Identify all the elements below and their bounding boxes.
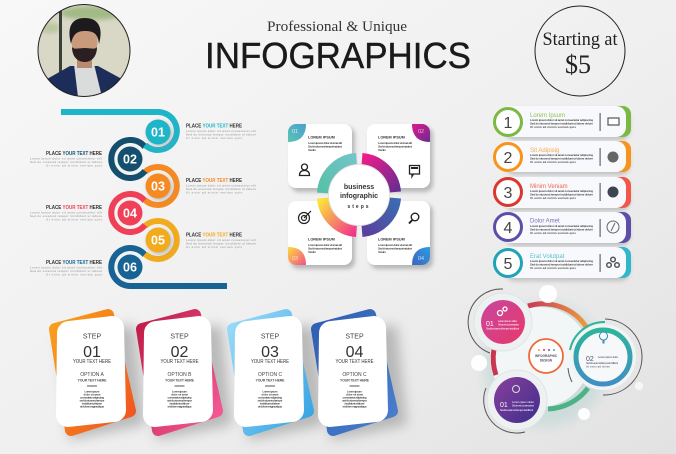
- step card 02: Lorem ipsum: [172, 390, 187, 394]
- row 5: Lorem ipsum dolor sit amet consectetur adipiscing: [530, 259, 593, 263]
- card shadows: [58, 325, 407, 440]
- card 03: LOREM IPSUM: [308, 238, 335, 242]
- step card 04: [317, 315, 392, 430]
- label 04: PLACE YOUR TEXT HERE: [46, 205, 103, 211]
- row 2: Sed do eiusmod tempor incididunt ut labore dolore: [530, 156, 593, 160]
- center node: DESIGN: [540, 358, 553, 362]
- row 1: [494, 106, 631, 137]
- step card 02: YOUR TEXT HERE: [160, 359, 199, 365]
- step card 04: STEP: [345, 334, 364, 340]
- white ball bottom: [578, 408, 590, 420]
- node 01 pink: Lorem ipsum dolor: [498, 319, 517, 323]
- node 02 teal ring: 02: [586, 356, 594, 363]
- label 03: Lorem ipsum dolor sit amet consectetur elit: [186, 184, 256, 188]
- inner disc: [490, 307, 590, 407]
- panel: six step snake timeline: [30, 112, 256, 286]
- label 04: [30, 205, 103, 222]
- step card 01: YOUR TEXT HERE: [78, 378, 107, 382]
- node 03 purple: Sit amet consectetur: [512, 404, 534, 408]
- panel: circular diagram: [468, 285, 643, 433]
- label 06: PLACE YOUR TEXT HERE: [46, 260, 103, 266]
- step card 04: incididunt ut labore: [344, 402, 365, 406]
- ring segment blue: [362, 198, 395, 231]
- ring segment magenta: [362, 159, 395, 192]
- node shadows: [147, 121, 173, 255]
- row 5: Ut enim ad minim veniam quis: [530, 266, 576, 270]
- row 1: Ut enim ad minim veniam quis: [530, 125, 576, 129]
- step card 01: dolor sit amet: [84, 392, 101, 396]
- row 1: Lorem ipsum dolor sit amet consectetur adipiscing: [530, 118, 593, 122]
- label 06: [30, 260, 103, 276]
- panel: four card business infographic: [288, 124, 433, 269]
- card 04: Ut enim: [378, 250, 386, 254]
- label 04: Lorem ipsum dolor sit amet consectetur elit: [30, 210, 102, 214]
- card 04: [367, 201, 430, 265]
- row 5: Erat Volutpat: [530, 254, 565, 260]
- label 02: Sed do eiusmod tempor incididunt ut labore: [30, 160, 102, 164]
- step card 04: consectetur adipiscing: [342, 396, 367, 400]
- row 4: Ut enim ad minim veniam quis: [530, 231, 576, 235]
- row 4: [494, 212, 631, 243]
- node 03 purple: [484, 370, 547, 433]
- title: Professional & Unique: [267, 19, 407, 35]
- step card 01: consectetur adipiscing: [80, 396, 104, 400]
- node 03 purple: Sed do eiusmod tempor incididunt: [500, 408, 533, 412]
- white ball top: [539, 285, 557, 303]
- ring 06: [111, 248, 227, 286]
- node 06: 06: [123, 260, 137, 274]
- step card 02: dolor sit amet: [171, 392, 188, 396]
- card shadows: [291, 127, 433, 269]
- node 03: [146, 174, 170, 198]
- card 02: Sed do eiusmod tempor incidunt: [378, 144, 412, 148]
- center node: [529, 339, 563, 373]
- label 02: [30, 151, 103, 168]
- row 3: Sed do eiusmod tempor incididunt ut labore dolore: [530, 192, 593, 196]
- label 02: Lorem ipsum dolor sit amet consectetur elit: [30, 156, 102, 160]
- row 5: 5: [504, 256, 513, 273]
- center disc: infographic: [340, 193, 378, 200]
- step card 03: STEP: [261, 334, 279, 340]
- portrait photo: [38, 4, 130, 97]
- label 02: Ut enim ad minim veniam quis: [46, 164, 103, 168]
- card 01: Ut enim: [308, 148, 316, 152]
- node 04: 04: [123, 206, 137, 220]
- card 03: [288, 201, 352, 265]
- label 03: Sed do eiusmod tempor incididunt ut labore: [186, 187, 256, 191]
- label 05: Sed do eiusmod tempor incididunt ut labore: [186, 242, 256, 246]
- step card 03: [233, 315, 308, 430]
- price badge: Starting at: [542, 29, 618, 50]
- arc bottom: [548, 388, 588, 409]
- step card 03: YOUR TEXT HERE: [256, 378, 285, 382]
- ring 03: [145, 167, 177, 205]
- label 06: Lorem ipsum dolor sit amet consectetur elit: [30, 266, 102, 270]
- icon: person: [300, 164, 310, 176]
- node 01: 01: [151, 126, 165, 140]
- node 01 pink: Sit amet consectetur: [498, 322, 519, 326]
- icon: magnifier: [409, 213, 419, 224]
- row 2: Lorem ipsum dolor sit amet consectetur adipiscing: [530, 153, 593, 157]
- node 02 teal ring: [568, 319, 642, 395]
- node 05: [146, 228, 170, 252]
- card 02: Lorem ipsum dolor sit amet elit: [378, 141, 412, 145]
- label 01: PLACE YOUR TEXT HERE: [186, 124, 243, 130]
- card 02: LOREM IPSUM: [378, 136, 405, 140]
- card 01: LOREM IPSUM: [308, 136, 335, 140]
- row 2: Ut enim ad minim veniam quis: [530, 160, 576, 164]
- white ball left: [471, 355, 487, 371]
- card 01: Lorem ipsum dolor sit amet elit: [308, 141, 342, 145]
- teal glow: [483, 303, 607, 427]
- node 01 pink: Sed do eiusmod tempor incididunt: [486, 326, 519, 330]
- title: INFOGRAPHICS: [205, 35, 471, 76]
- row shadows: [505, 109, 630, 281]
- arc top: [528, 304, 587, 328]
- step card 03: incididunt ut labore: [260, 402, 280, 406]
- node 06: [118, 254, 142, 280]
- step card 02: sed do eiusmod tempor: [167, 398, 193, 402]
- node 02 teal ring: Ut enim ad minim: [586, 364, 611, 368]
- card 02: [367, 124, 430, 188]
- card 03: 03: [292, 256, 298, 262]
- label 01: [186, 124, 256, 140]
- step card 03: dolor sit amet: [262, 392, 279, 396]
- label 01: Sed do eiusmod tempor incididunt ut labore: [186, 132, 256, 136]
- row 2: [494, 141, 631, 172]
- arc left: [493, 349, 496, 375]
- step card 03: et dolore magna aliqua: [258, 404, 282, 408]
- ring 05: [145, 221, 177, 259]
- node 02 teal ring: Lorem ipsum dolor: [598, 355, 618, 359]
- card 02: Ut enim: [378, 148, 386, 152]
- row 4: Lorem ipsum dolor sit amet consectetur adipiscing: [530, 224, 593, 228]
- step card 04: 04: [346, 344, 364, 361]
- step card 03: 03: [261, 344, 279, 361]
- label 03: [186, 178, 256, 194]
- label 04: Sed do eiusmod tempor incididunt ut labore: [30, 214, 102, 218]
- center disc: steps: [347, 204, 371, 210]
- step card 04: YOUR TEXT HERE: [336, 359, 374, 365]
- node 01 pink: 01: [486, 321, 494, 328]
- label 05: PLACE YOUR TEXT HERE: [186, 232, 243, 238]
- node 01 pink: [468, 289, 532, 353]
- step card 01: 01: [83, 344, 101, 361]
- step card 04: sed do eiusmod tempor: [342, 398, 368, 402]
- portrait outline: [38, 4, 130, 96]
- node 03 purple: 01: [500, 402, 508, 409]
- label 05: Lorem ipsum dolor sit amet consectetur elit: [186, 238, 256, 242]
- step card 01: sed do eiusmod tempor: [80, 398, 105, 402]
- step card 04: YOUR TEXT HERE: [340, 378, 370, 382]
- row 4: 4: [504, 220, 513, 237]
- step card 02: STEP: [170, 334, 189, 340]
- label 06: Ut enim ad minim veniam quis: [46, 272, 103, 276]
- center node: INFOGRAPHIC: [535, 354, 558, 358]
- node 05: 05: [151, 234, 165, 248]
- row 3: 3: [504, 185, 513, 202]
- step card 04: dolor sit amet: [346, 392, 363, 396]
- row 2: Sit Adipisig: [530, 148, 559, 154]
- panel: step cards: [55, 315, 407, 440]
- icon: chat bubble: [410, 166, 420, 176]
- icon: target: [298, 211, 311, 224]
- ring segment yellow: [323, 198, 356, 231]
- step card 03: sed do eiusmod tempor: [258, 398, 283, 402]
- step card 01: Lorem ipsum: [84, 390, 100, 394]
- row 3: Ut enim ad minim veniam quis: [530, 196, 576, 200]
- step card 01: et dolore magna aliqua: [80, 404, 104, 408]
- ring segment teal: [323, 159, 356, 193]
- step card 02: YOUR TEXT HERE: [165, 378, 195, 382]
- step card 01: incididunt ut labore: [82, 402, 102, 406]
- card 04: Sed do eiusmod tempor incidunt: [378, 246, 412, 250]
- step card 04: et dolore magna aliqua: [342, 404, 367, 408]
- node 01: [146, 120, 170, 144]
- card 04: LOREM IPSUM: [378, 238, 405, 242]
- label 03: Ut enim ad minim veniam quis: [186, 190, 243, 194]
- row 1: Sed do eiusmod tempor incididunt ut labore dolore: [530, 122, 593, 126]
- step card 03: Lorem ipsum: [262, 390, 278, 394]
- card 04: Lorem ipsum dolor sit amet elit: [378, 243, 412, 247]
- row 2: 2: [504, 150, 513, 167]
- step card 02: 02: [171, 344, 188, 361]
- label 01: Ut enim ad minim veniam quis: [186, 136, 243, 140]
- step card 03: YOUR TEXT HERE: [251, 359, 289, 365]
- row 1: 1: [504, 115, 513, 132]
- node 03: 03: [151, 180, 165, 194]
- label 04: Ut enim ad minim veniam quis: [46, 218, 103, 222]
- step card 02: OPTION B: [168, 372, 192, 378]
- step card 03: consectetur adipiscing: [258, 396, 282, 400]
- white ball right: [635, 382, 643, 390]
- row 4: Dolor Amet: [530, 218, 560, 224]
- step card 02: consectetur adipiscing: [168, 396, 192, 400]
- card 03: Ut enim: [308, 250, 316, 254]
- row 1: Lorem Ipsum: [530, 113, 565, 119]
- step card 04: OPTION C: [342, 372, 367, 378]
- ring 04: [111, 194, 145, 232]
- row 4: Sed do eiusmod tempor incididunt ut labore dolore: [530, 228, 593, 232]
- step card 04: Lorem ipsum: [347, 390, 362, 394]
- card 04: 04: [418, 256, 424, 262]
- price badge: [535, 6, 625, 96]
- row 3: Minim Veniam: [530, 184, 568, 190]
- node 02 teal ring: Sed do eiusmod tempor incididunt: [586, 361, 618, 365]
- step card 01: OPTION A: [80, 372, 104, 378]
- node 04: [118, 200, 142, 226]
- card 01: Sed do eiusmod tempor incidunt: [308, 144, 342, 148]
- step card 02: [142, 315, 217, 430]
- card 03: Sed do eiusmod tempor incidunt: [308, 246, 342, 250]
- row 5: [494, 247, 631, 278]
- row 5: Sed do eiusmod tempor incididunt ut labore dolore: [530, 262, 593, 266]
- ring 01: [61, 112, 177, 150]
- center disc: business: [344, 184, 374, 191]
- ring 02: [111, 140, 145, 178]
- price badge: $5: [565, 50, 591, 79]
- step card 03: OPTION C: [258, 372, 282, 378]
- node 02: [118, 146, 142, 172]
- panel: five step list: [494, 106, 631, 281]
- step card 02: incididunt ut labore: [170, 402, 190, 406]
- label 06: Sed do eiusmod tempor incididunt ut labore: [30, 269, 102, 273]
- card 02: 02: [418, 129, 424, 135]
- card 01: [288, 124, 352, 188]
- label 03: PLACE YOUR TEXT HERE: [186, 178, 243, 184]
- step card 02: et dolore magna aliqua: [168, 404, 192, 408]
- card 01: 01: [292, 129, 298, 135]
- label 01: Lorem ipsum dolor sit amet consectetur elit: [186, 129, 256, 133]
- node 02: 02: [123, 152, 137, 166]
- node 03 purple: Lorem ipsum dolor: [512, 400, 534, 404]
- step card 01: STEP: [83, 334, 101, 340]
- step card 01: YOUR TEXT HERE: [73, 359, 111, 365]
- label 05: Ut enim ad minim veniam quis: [186, 245, 243, 249]
- label 05: [186, 232, 256, 249]
- row 3: Lorem ipsum dolor sit amet consectetur adipiscing: [530, 189, 593, 193]
- row 3: [494, 177, 631, 208]
- center disc: [328, 164, 390, 226]
- label 02: PLACE YOUR TEXT HERE: [46, 151, 103, 157]
- step card 01: [55, 315, 130, 430]
- card 03: Lorem ipsum dolor sit amet elit: [308, 243, 342, 247]
